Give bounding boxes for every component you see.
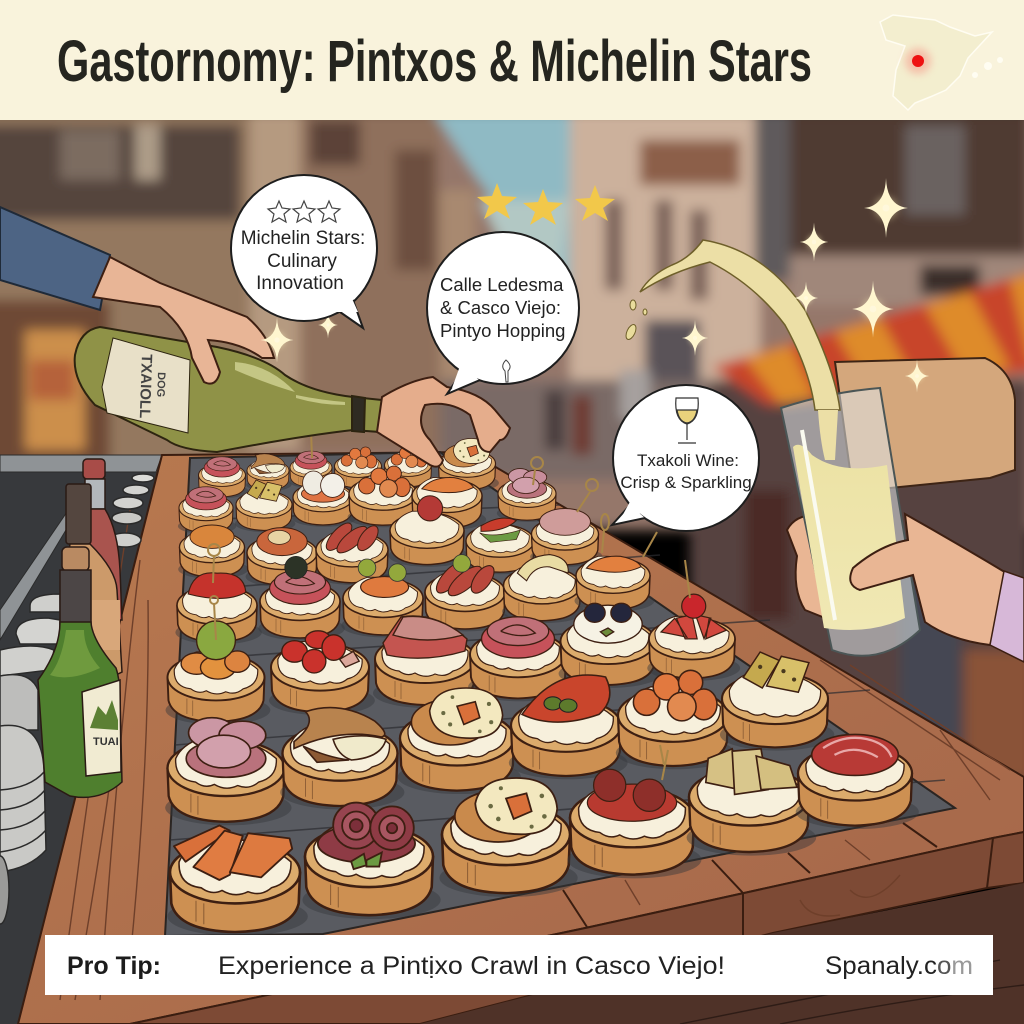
bubble text: Pintyo Hopping xyxy=(440,320,565,341)
skewer picks xyxy=(208,426,690,780)
hand xyxy=(93,257,274,384)
left bowl stacks xyxy=(0,474,154,924)
second hand reaching for a pintxo xyxy=(377,377,510,467)
pro tip banner xyxy=(45,935,993,995)
table underside xyxy=(420,883,1024,1024)
icon: green wine bottle: TUAI xyxy=(93,736,119,748)
pintxos row 4 xyxy=(175,555,654,644)
icon: wine bottle xyxy=(75,327,382,452)
icon: wine bottle: TXAIOLL xyxy=(136,354,155,419)
pintxos row 6 xyxy=(178,466,559,534)
bubble text: Calle Ledesma xyxy=(440,274,564,295)
bubble text: Michelin Stars: xyxy=(241,228,365,249)
wine pour stream xyxy=(640,240,840,410)
bubble text: Innovation xyxy=(256,273,344,294)
icon: wine glass xyxy=(676,398,698,443)
pintxos row 7 xyxy=(198,438,499,498)
sparkles xyxy=(260,178,929,392)
icon: rose bottle xyxy=(83,459,122,620)
right arm sleeve xyxy=(835,358,1015,488)
brand: Spanaly.com xyxy=(825,952,973,980)
icon: pintxo skewer xyxy=(503,360,510,382)
pro tip label: Pro Tip: xyxy=(67,952,161,980)
speech bubble: Michelin Stars xyxy=(231,175,377,328)
wooden table xyxy=(18,452,1024,1024)
map of Spain with location marker xyxy=(880,15,1003,110)
header band xyxy=(0,0,1024,120)
wine glass with pour xyxy=(624,240,920,656)
left hand pouring wine xyxy=(0,207,382,452)
back fingers holding glass xyxy=(787,515,830,620)
pintxos row 3 xyxy=(166,594,740,725)
icon: three outline stars xyxy=(268,201,340,222)
table top surface xyxy=(18,452,1024,1024)
icon: green wine bottle xyxy=(38,547,122,797)
right hand holding glass xyxy=(850,514,1024,662)
glass of txakoli xyxy=(781,388,920,656)
pintxos row 5 xyxy=(178,496,603,587)
back counter with sink xyxy=(0,455,162,1024)
gold Michelin stars xyxy=(477,183,615,225)
icon: amber bottle xyxy=(62,484,122,690)
speech bubble: Txakoli Wine xyxy=(612,385,759,531)
speech bubble: Calle Ledesma xyxy=(427,232,579,394)
slate serving tray xyxy=(165,452,955,936)
pintxos rows xyxy=(165,426,919,936)
bubble text: & Casco Viejo: xyxy=(440,297,561,318)
pintxos row 2 xyxy=(165,652,834,825)
sleeve xyxy=(0,207,110,310)
pro tip message: Experience a Pintịxo Crawl in Casco Viejo! xyxy=(218,952,725,980)
bottles on counter xyxy=(38,459,122,797)
blurred street background xyxy=(0,110,1024,800)
bubble text: Crisp & Sparkling xyxy=(620,473,752,492)
icon: wine bottle: DOG xyxy=(154,372,167,397)
bubble text: Txakoli Wine: xyxy=(637,451,739,470)
table front face xyxy=(130,832,1024,1024)
bubble text: Culinary xyxy=(267,251,337,272)
pintxos front row xyxy=(167,734,919,936)
